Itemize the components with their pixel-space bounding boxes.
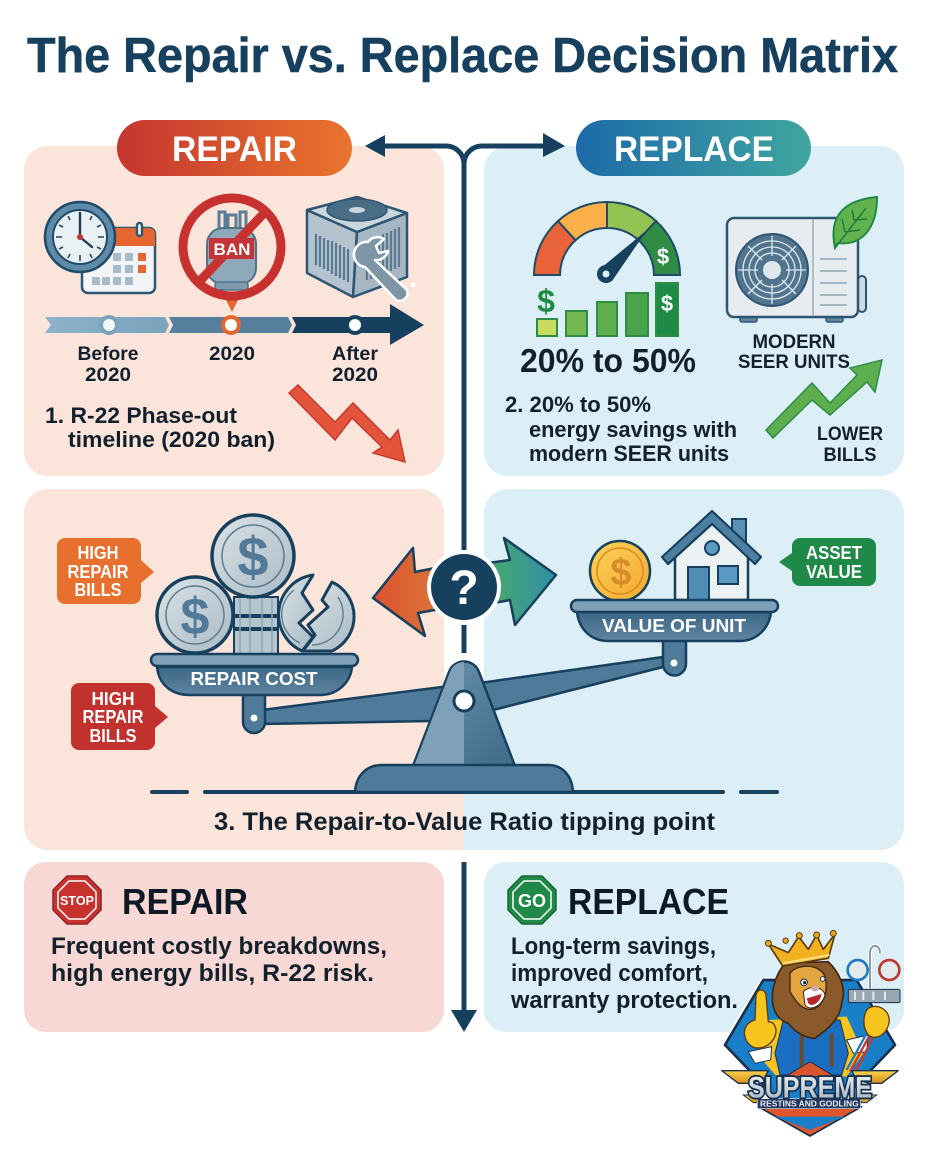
timeline labels: 2020 — [85, 365, 131, 386]
icon: stop sign: STOP — [60, 893, 94, 908]
panel: repair verdict — [24, 862, 444, 1032]
icon: modern AC unit — [727, 197, 877, 322]
replace header pill — [576, 120, 811, 176]
icon: clock — [45, 202, 115, 272]
timeline labels: After — [332, 344, 379, 365]
label: modern SEER units — [738, 332, 850, 373]
callout: asset value: ASSET — [806, 543, 862, 563]
panel: replace verdict — [484, 862, 904, 1032]
text: energy savings: modern SEER units — [529, 441, 729, 466]
logo: Supreme lion mascot badge: RESTINS AND GODLING — [760, 1099, 859, 1109]
label: lower bills: BILLS — [824, 445, 876, 466]
label: modern SEER units: SEER UNITS — [738, 352, 850, 373]
callout: red high repair bills: REPAIR — [82, 707, 144, 727]
bar chart: savings: $ — [661, 291, 673, 316]
text: repair verdict: Frequent costly breakdowns, — [51, 933, 387, 960]
callout: red high repair bills: BILLS — [90, 726, 136, 746]
text: replace verdict: improved comfort, — [511, 960, 708, 987]
lion face — [790, 966, 826, 1009]
icon: condenser with wrench — [307, 197, 416, 301]
right pan: VALUE OF UNIT — [602, 616, 746, 636]
heading: replace verdict: REPLACE — [568, 881, 729, 922]
left pan — [151, 654, 358, 733]
hoses and right glove — [850, 1033, 875, 1073]
beam — [262, 657, 663, 724]
timeline labels: Before — [78, 344, 138, 365]
wings — [722, 1071, 768, 1083]
icon: efficiency gauge — [534, 202, 680, 283]
callout: orange high repair bills — [57, 538, 154, 604]
badge base — [758, 1107, 862, 1136]
text: tipping point: 3. The Repair-to-Value Ratio tipping point — [214, 808, 716, 836]
label: modern SEER units: MODERN — [752, 332, 836, 353]
heading: repair verdict: REPAIR — [122, 881, 248, 922]
logo: Supreme lion mascot badge — [721, 930, 900, 1138]
text: energy savings: energy savings with — [529, 417, 737, 442]
callout: asset value: VALUE — [806, 562, 862, 582]
lion mane — [772, 962, 843, 1038]
right pan — [571, 600, 778, 676]
icon: question mark: ? — [449, 562, 479, 615]
text: R-22 phase-out: timeline (2020 ban) — [68, 427, 275, 452]
arrow: toward repair — [373, 548, 440, 636]
text: replace verdict — [510, 933, 738, 1014]
icon: question mark — [427, 550, 501, 624]
label: lower bills — [817, 424, 883, 466]
icon: go sign: GO — [518, 891, 546, 911]
timeline labels: 2020 — [209, 344, 255, 365]
panel: repair top — [24, 146, 444, 476]
callout: red high repair bills: HIGH — [92, 689, 134, 709]
icon: go sign — [508, 876, 556, 924]
icon: pile of coins: $ — [237, 525, 269, 588]
text: replace verdict: warranty protection. — [510, 987, 738, 1014]
ground line — [152, 790, 777, 794]
label: lower bills: LOWER — [817, 424, 883, 445]
text: R-22 phase-out: 1. R-22 Phase-out — [45, 403, 238, 428]
bar chart: savings: $ — [537, 283, 555, 319]
repair header pill: REPAIR — [172, 130, 297, 169]
icon: R-22 ban — [183, 198, 281, 312]
panel: scale right background — [464, 489, 904, 850]
icon: efficiency gauge: $ — [657, 244, 669, 269]
callout: orange high repair bills: HIGH — [78, 543, 118, 563]
panel: replace top — [484, 146, 904, 476]
timeline bar — [45, 304, 424, 345]
text: repair verdict: high energy bills, R-22 risk. — [51, 960, 374, 987]
repair header pill — [117, 120, 352, 176]
decision axis arrows — [365, 133, 565, 1032]
callout: asset value — [779, 538, 876, 586]
replace header pill: REPLACE — [614, 130, 774, 169]
timeline labels — [78, 344, 379, 386]
pointing glove — [744, 990, 776, 1048]
text: repair verdict — [51, 933, 387, 987]
callout: red high repair bills — [71, 683, 168, 750]
panel: scale left background — [24, 489, 464, 850]
gauge manifold — [848, 946, 900, 1003]
callout: orange high repair bills: REPAIR — [68, 562, 128, 582]
text: energy savings — [505, 392, 737, 466]
icon: gold coin — [590, 541, 650, 601]
icon: red down arrow — [289, 385, 405, 462]
text: energy savings: 2. 20% to 50% — [505, 392, 651, 417]
statistic: 20% to 50%: 20% to 50% — [520, 342, 696, 379]
icon: stop sign — [53, 876, 101, 924]
timeline labels: 2020 — [332, 365, 378, 386]
logo: Supreme lion mascot badge: SUPREME — [748, 1071, 872, 1104]
icon: house — [662, 511, 761, 600]
callout: orange high repair bills: BILLS — [74, 580, 122, 600]
left pan: REPAIR COST — [190, 669, 318, 689]
text: replace verdict: Long-term savings, — [511, 933, 716, 960]
fulcrum — [355, 662, 573, 792]
bar chart: savings — [537, 283, 678, 336]
icon: gold coin: $ — [610, 552, 632, 594]
title: The Repair vs. Replace Decision Matrix — [27, 29, 898, 83]
icon: green up arrow — [766, 360, 882, 438]
arrow: toward replace — [488, 538, 556, 625]
balance scale — [151, 600, 778, 792]
crown — [768, 934, 835, 966]
text: R-22 phase-out — [45, 403, 275, 452]
icon: pile of coins: $ — [181, 588, 210, 646]
icon: calendar — [82, 223, 155, 293]
icon: R-22 ban: BAN — [214, 241, 250, 259]
icon: pile of coins — [157, 515, 354, 654]
